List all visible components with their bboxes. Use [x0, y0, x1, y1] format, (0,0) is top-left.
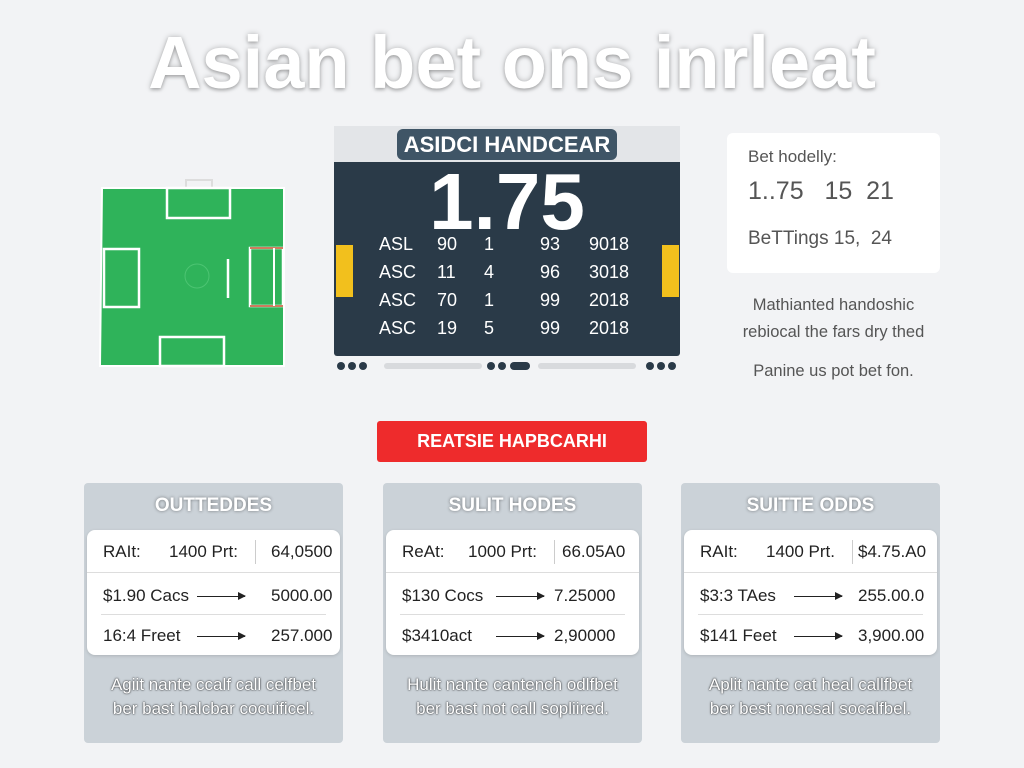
scoreboard rows: 99	[540, 318, 560, 338]
panel: card 1: Agiit nante ccalf call celfbet	[111, 675, 316, 694]
panel: card 1: RAIt:	[103, 542, 141, 561]
panel: card 3: ber best noncsal socalfbel.	[710, 699, 911, 718]
panel: card 3: $141 Feet	[700, 626, 777, 645]
text block: description: Panine us pot bet fon.	[753, 362, 914, 380]
panel: card 1: $1.90 Cacs	[103, 586, 189, 605]
scoreboard dots bar	[337, 362, 676, 370]
panel: bet info: Bet hodelly:	[748, 147, 837, 166]
panel: card 3: RAIt:	[700, 542, 738, 561]
panel: card 1: 257.000	[271, 626, 332, 645]
scoreboard rows: ASC	[379, 262, 416, 282]
scoreboard rows: 3018	[589, 262, 629, 282]
scoreboard rows: 19	[437, 318, 457, 338]
panel: card 1: ber bast halcbar cocuificel.	[113, 699, 314, 718]
panel: card 2: 66.05A0	[562, 542, 625, 561]
scoreboard	[334, 126, 680, 356]
panel: bet info: 1..75 15 21	[748, 177, 894, 205]
panel: card 2: ber bast not call sopliired.	[416, 699, 609, 718]
scoreboard rows: 96	[540, 262, 560, 282]
big number: 1.75	[429, 157, 585, 246]
panel: card 2: Hulit nante cantench odlfbet	[407, 675, 618, 694]
scoreboard rows	[379, 234, 629, 338]
panel: card 2: $3410act	[402, 626, 472, 645]
scoreboard rows: 2018	[589, 290, 629, 310]
panel: card 2	[383, 483, 642, 743]
scoreboard heading: ASIDCI HANDCEAR	[404, 132, 610, 157]
scoreboard rows: ASC	[379, 318, 416, 338]
panel: card 1: 64,0500	[271, 542, 332, 561]
panel: card 3: 3,900.00	[858, 626, 924, 645]
panel: card 3: $3:3 TAes	[700, 586, 776, 605]
panel: card 1: 1400 Prt:	[169, 542, 238, 561]
panel: card 3: SUITTE ODDS	[747, 495, 874, 516]
red banner button	[377, 421, 647, 462]
panel: card 1: 5000.00	[271, 586, 332, 605]
icon: football pitch	[99, 179, 285, 367]
scoreboard rows: 1	[484, 234, 494, 254]
scoreboard rows: ASC	[379, 290, 416, 310]
panel: card 1	[84, 483, 343, 743]
panel: card 3: Aplit nante cat heal callfbet	[709, 675, 912, 694]
panel: card 1: 16:4 Freet	[103, 626, 180, 645]
red banner button: REATSIE HAPBCARHI	[417, 431, 607, 451]
panel: card 1: OUTTEDDES	[155, 495, 272, 516]
scoreboard rows: 90	[437, 234, 457, 254]
scoreboard rows: 70	[437, 290, 457, 310]
scoreboard rows: 1	[484, 290, 494, 310]
text block: description: rebiocal the fars dry thed	[743, 323, 924, 341]
panel: card 2: SULIT HODES	[449, 495, 576, 516]
text block: description: Mathianted handoshic	[753, 296, 914, 314]
panel: card 2: ReAt:	[402, 542, 445, 561]
panel: card 2: 2,90000	[554, 626, 615, 645]
scoreboard rows: 93	[540, 234, 560, 254]
scoreboard rows: 2018	[589, 318, 629, 338]
panel: card 3: $4.75.A0	[858, 542, 926, 561]
scoreboard rows: 5	[484, 318, 494, 338]
title: Asian bet ons inrleat	[148, 21, 876, 104]
yellow markers	[336, 245, 353, 297]
scoreboard rows: 4	[484, 262, 494, 282]
panel: card 2: $130 Cocs	[402, 586, 483, 605]
scoreboard rows: 11	[437, 262, 456, 282]
panel: card 3: 255.00.0	[858, 586, 924, 605]
panel: bet info	[727, 133, 940, 273]
scoreboard rows: 9018	[589, 234, 629, 254]
scoreboard rows: ASL	[379, 234, 413, 254]
panel: card 2: 1000 Prt:	[468, 542, 537, 561]
panel: bet info: BeTTings 15, 24	[748, 228, 892, 249]
panel: card 2: 7.25000	[554, 586, 615, 605]
panel: card 3: 1400 Prt.	[766, 542, 835, 561]
scoreboard rows: 99	[540, 290, 560, 310]
text block: description	[743, 296, 924, 380]
panel: card 3	[681, 483, 940, 743]
